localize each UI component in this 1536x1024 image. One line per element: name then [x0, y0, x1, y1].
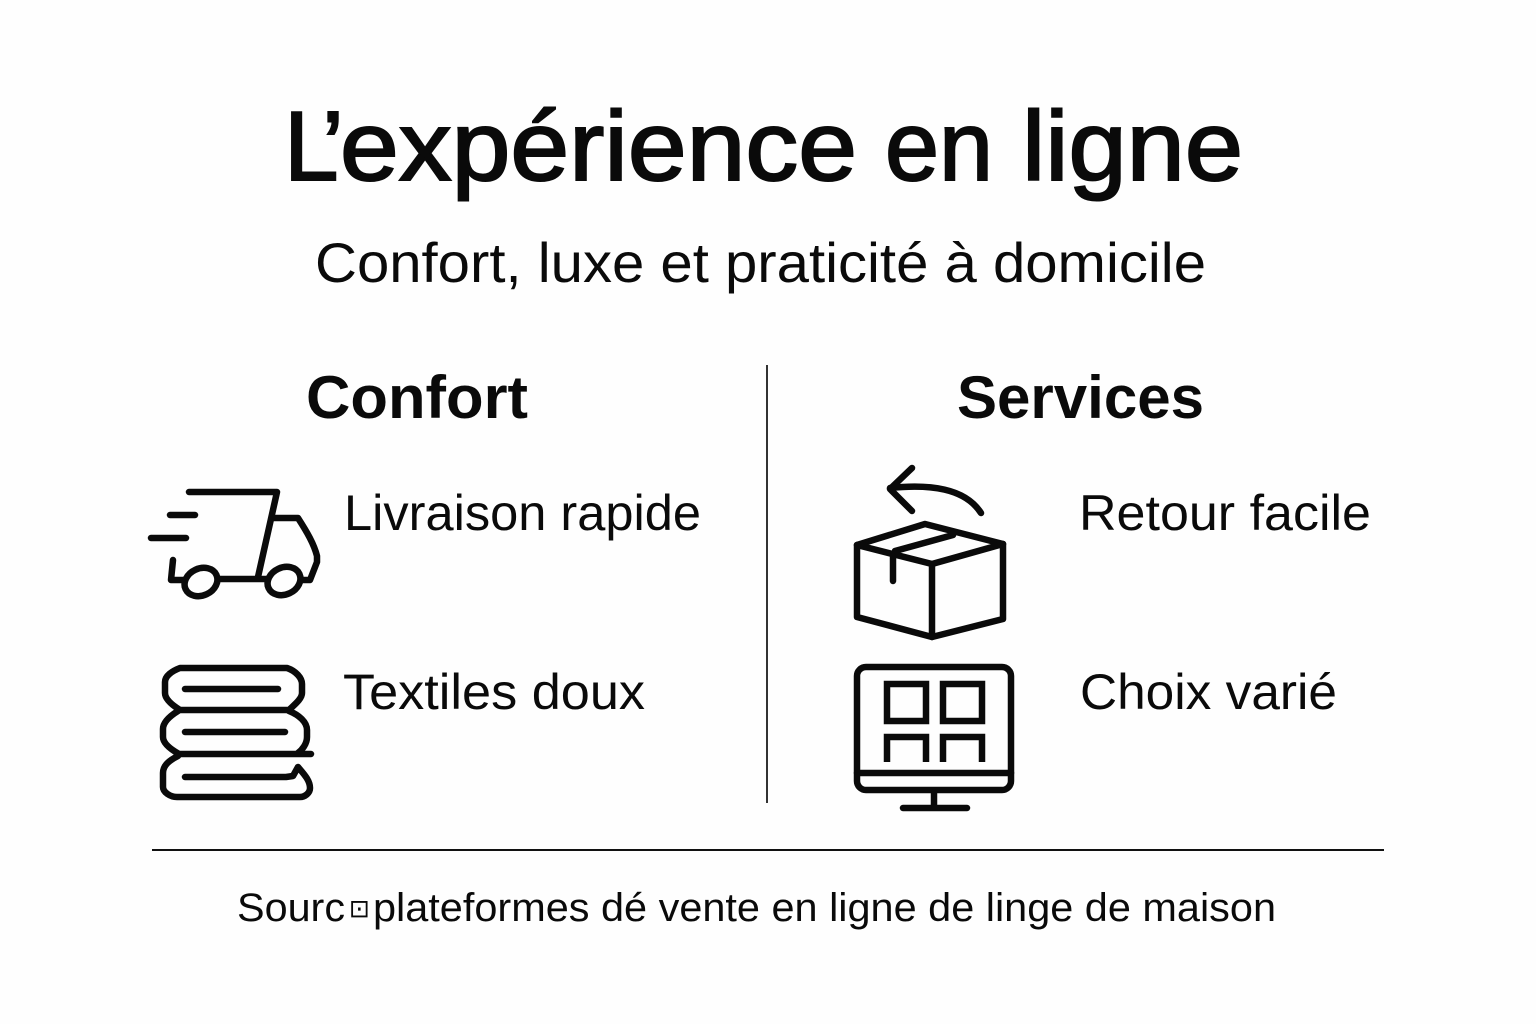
- panel: services: [857, 364, 1371, 808]
- label: choix varié: Choix varié: [1080, 664, 1337, 720]
- icon: return box: [857, 468, 1003, 637]
- title: ’: [322, 91, 344, 201]
- source note: Sourc: [237, 886, 345, 930]
- title: ligne: [1022, 91, 1243, 201]
- divider: footer rule: [152, 849, 1384, 851]
- title: L: [284, 91, 339, 201]
- title: en: [885, 91, 993, 201]
- source note: plateformes dé vente en ligne de linge de maison: [373, 886, 1276, 930]
- divider: vertical: [766, 365, 768, 803]
- icon: folded textiles: [163, 668, 311, 797]
- label: livraison rapide: Livraison rapide: [344, 485, 701, 541]
- heading: confort: Confort: [306, 364, 528, 431]
- label: textiles doux: Textiles doux: [343, 664, 645, 720]
- label: retour facile: Retour facile: [1079, 485, 1371, 541]
- title: [284, 91, 1243, 201]
- subtitle: Confort, luxe et praticité à domicile: [315, 231, 1206, 294]
- heading: services: Services: [957, 364, 1204, 431]
- panel: confort: [151, 364, 701, 797]
- title: expérience: [340, 91, 857, 201]
- icon: monitor with catalogue grid: [857, 667, 1011, 808]
- source note: ⊡: [349, 895, 370, 923]
- icon: delivery truck: [151, 492, 317, 601]
